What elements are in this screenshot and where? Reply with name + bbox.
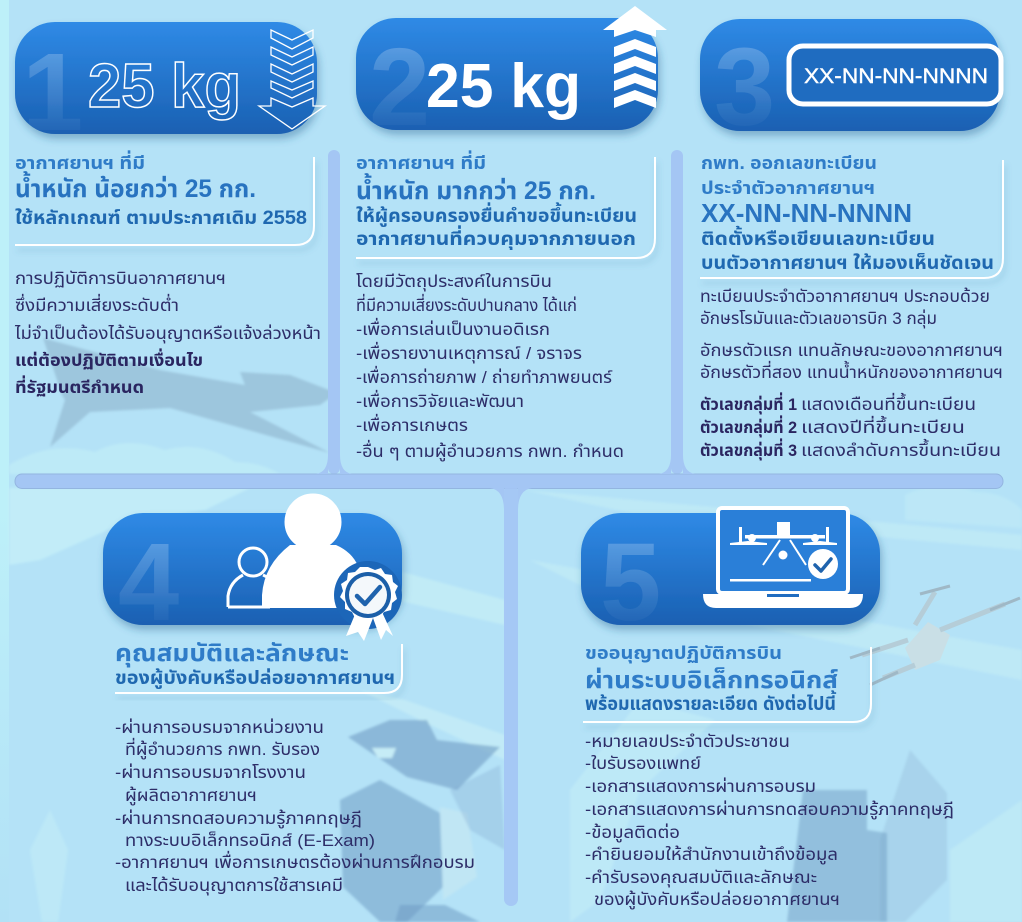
body text: ไม่จำเป็นต้องได้รับอนุญาตหรือแจ้งล่วงหน้า xyxy=(14,323,321,344)
heading text: ขออนุญาตปฏิบัติการบิน xyxy=(585,643,782,664)
panel 2: over 25 kg xyxy=(356,6,667,463)
body text: อักษรตัวแรก แทนลักษณะของอากาศยานฯ xyxy=(700,341,1003,360)
body text: -อื่น ๆ ตามผู้อำนวยการ กพท. กำหนด xyxy=(356,439,624,463)
body text: -ข้อมูลติดต่อ xyxy=(585,822,680,844)
heading frame xyxy=(115,644,402,693)
heading text: คุณสมบัติและลักษณะ xyxy=(115,640,349,668)
body text: -ผ่านการทดสอบความรู้ภาคทฤษฎี xyxy=(115,808,362,830)
banner 1: 25 kg xyxy=(88,52,241,121)
body text xyxy=(700,286,1003,461)
body text: อักษรตัวที่สอง แทนน้ำหนักของอากาศยานฯ xyxy=(700,360,1003,382)
body text: -ผ่านการอบรมจากโรงงาน xyxy=(115,763,306,782)
body text xyxy=(585,732,954,911)
banner 4: 4 xyxy=(118,521,179,644)
banner 2: 2 xyxy=(369,26,430,149)
banner 3: 3 xyxy=(714,26,775,149)
body text: ผู้ผลิตอากาศยานฯ xyxy=(125,785,257,807)
banner 5 xyxy=(581,508,880,644)
registration plate xyxy=(789,46,1001,104)
rosette xyxy=(334,561,402,641)
heading text: พร้อมแสดงรายละเอียด ดังต่อไปนี้ xyxy=(585,690,837,715)
clouds xyxy=(9,443,280,474)
body text: -คำรับรองคุณสมบัติและลักษณะ xyxy=(585,868,817,888)
plane silhouette xyxy=(43,338,337,453)
heading text: บนตัวอากาศยานฯ ให้มองเห็นชัดเจน xyxy=(701,251,994,274)
body text: แสดงลำดับการขึ้นทะเบียน xyxy=(801,438,1001,460)
heading text: น้ำหนัก น้อยกว่า 25 กก. xyxy=(15,171,256,203)
banner 4 xyxy=(103,494,402,644)
body text: -เพื่อการถ่ายภาพ / ถ่ายทำภาพยนตร์ xyxy=(356,365,613,387)
heading text xyxy=(701,153,994,274)
heading frame xyxy=(356,157,655,258)
heading text: ติดตั้งหรือเขียนเลขทะเบียน xyxy=(701,226,935,250)
body text: ทางระบบอิเล็กทรอนิกส์ (E-Exam) xyxy=(125,831,375,850)
heading text: ใช้หลักเกณฑ์ ตามประกาศเดิม 2558 xyxy=(15,207,307,229)
body text: การปฏิบัติการบินอากาศยานฯ xyxy=(15,269,226,288)
body text: -เพื่อรายงานเหตุการณ์ / จราจร xyxy=(356,341,582,364)
drone xyxy=(730,522,837,565)
heading frame xyxy=(583,647,871,722)
body text: ของผู้บังคับหรือปล่อยอากาศยานฯ xyxy=(594,889,840,911)
body text: -หมายเลขประจำตัวประชาชน xyxy=(585,732,790,751)
heading text xyxy=(15,150,307,229)
heading text: ประจำตัวอากาศยานฯ xyxy=(701,178,875,198)
heading text: อากาศยานฯ ที่มี xyxy=(356,150,486,173)
body text: -คำยินยอมให้สำนักงานเข้าถึงข้อมูล xyxy=(585,844,838,866)
panel 1: under 25 kg xyxy=(14,22,325,397)
banner 2: 25 kg xyxy=(426,52,581,121)
drone robot shapes xyxy=(348,720,500,790)
heading text: อากาศยานฯ ที่มี xyxy=(15,150,145,173)
building shapes xyxy=(880,750,947,922)
panel 3: registration xyxy=(700,19,1003,461)
heading frame xyxy=(700,160,1003,278)
heading text: น้ำหนัก มากกว่า 25 กก. xyxy=(356,173,596,205)
banner 5: 5 xyxy=(600,521,661,644)
icon: people with rosette xyxy=(228,494,402,641)
banner 1 xyxy=(15,22,325,154)
body text: ซึ่งมีความเสี่ยงระดับต่ำ xyxy=(15,293,179,315)
banner 1: 1 xyxy=(22,31,83,154)
heading text: อากาศยานที่ควบคุมจากภายนอก xyxy=(356,225,636,250)
icon: up arrow xyxy=(603,6,667,108)
body text: -ผ่านการอบรมจากหน่วยงาน xyxy=(115,718,324,737)
banner 2 xyxy=(356,6,667,149)
body text: ตัวเลขกลุ่มที่ 3 xyxy=(700,438,797,461)
body text xyxy=(356,272,624,463)
panel 4: pilot qualifications xyxy=(103,494,475,896)
body text: แต่ต้องปฏิบัติตามเงื่อนไข xyxy=(15,348,203,370)
body text: อักษรโรมันและตัวเลขอารบิก 3 กลุ่ม xyxy=(700,309,937,329)
body text xyxy=(14,269,321,397)
body text: แสดงปีที่ขึ้นทะเบียน xyxy=(801,415,965,437)
icon: laptop with drone xyxy=(703,508,863,608)
heading text: กพท. ออกเลขทะเบียน xyxy=(701,153,877,173)
panel backgrounds and connector bars xyxy=(15,150,1003,906)
body text: -เพื่อการวิจัยและพัฒนา xyxy=(356,389,524,411)
body text: โดยมีวัตถุประสงค์ในการบิน xyxy=(356,272,552,292)
body text: -เอกสารแสดงการผ่านการทดสอบความรู้ภาคทฤษฎี xyxy=(585,799,954,821)
body text: -เพื่อการเล่นเป็นงานอดิเรก xyxy=(356,317,550,339)
heading text: XX-NN-NN-NNNN xyxy=(701,198,912,228)
body text: -อากาศยานฯ เพื่อการเกษตรต้องผ่านการฝึกอบรม xyxy=(115,850,475,872)
body text: ตัวเลขกลุ่มที่ 2 xyxy=(700,415,797,438)
body text: ทะเบียนประจำตัวอากาศยานฯ ประกอบด้วย xyxy=(700,286,990,306)
body text: -ใบรับรองแพทย์ xyxy=(585,754,701,773)
body text: แสดงเดือนที่ขึ้นทะเบียน xyxy=(801,392,976,414)
drone white xyxy=(850,586,1020,685)
heading text xyxy=(115,640,395,689)
panel 5: electronic licence xyxy=(581,508,954,911)
heading text xyxy=(356,150,637,250)
heading text: ผ่านระบบอิเล็กทรอนิกส์ xyxy=(585,666,838,694)
heading frame xyxy=(15,157,314,245)
body text: ตัวเลขกลุ่มที่ 1 xyxy=(700,392,797,415)
banner 3 xyxy=(700,19,1001,149)
icon: down arrow outline xyxy=(259,30,325,129)
registration plate: XX-NN-NN-NNNN xyxy=(804,65,988,88)
body text: และได้รับอนุญาตการใช้สารเคมี xyxy=(125,875,343,896)
body text: -เพื่อการเกษตร xyxy=(356,413,468,435)
body text: ที่มีความเสี่ยงระดับปานกลาง ได้แก่ xyxy=(356,293,577,315)
body text: ที่รัฐมนตรีกำหนด xyxy=(15,375,144,397)
body text xyxy=(115,718,475,896)
body text: -เอกสารแสดงการผ่านการอบรม xyxy=(585,777,816,796)
heading text: ของผู้บังคับหรือปล่อยอากาศยานฯ xyxy=(115,667,395,689)
heading text: ให้ผู้ครอบครองยื่นคำขอขึ้นทะเบียน xyxy=(356,202,637,227)
body text: ที่ผู้อำนวยการ กพท. รับรอง xyxy=(125,737,320,761)
heading text xyxy=(585,643,838,715)
